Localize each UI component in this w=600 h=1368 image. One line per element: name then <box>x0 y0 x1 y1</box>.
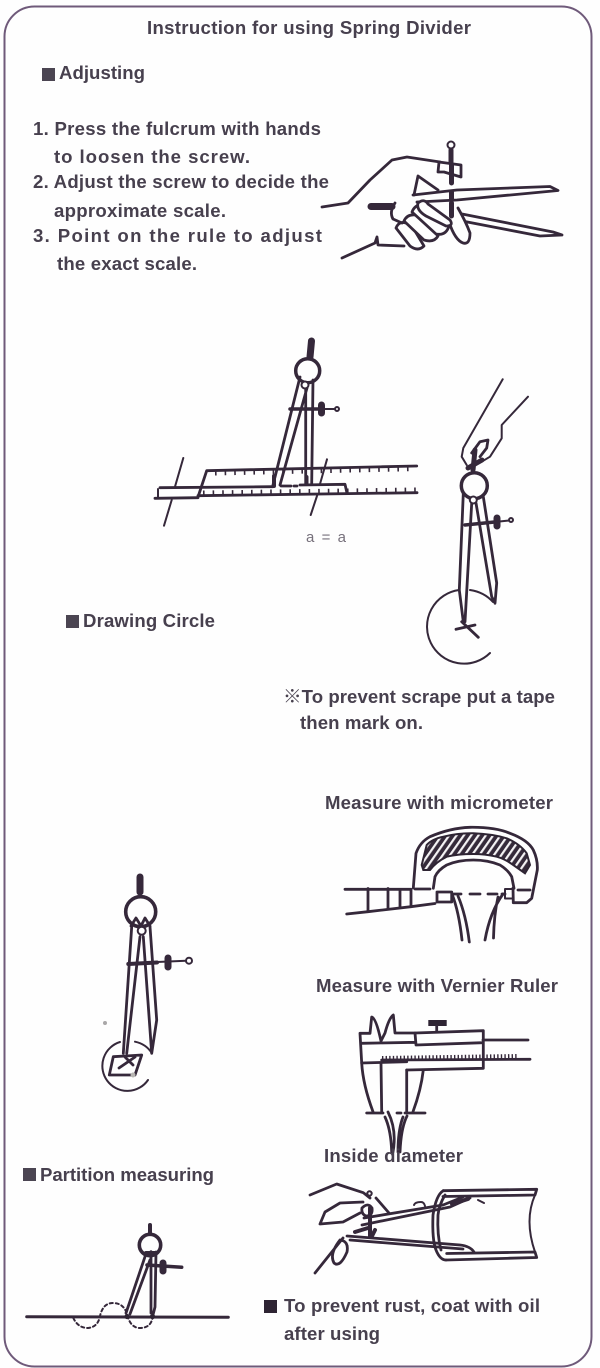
chart: divider set against a rule, a = a <box>155 341 417 526</box>
heading: Adjusting: Adjusting <box>59 62 145 83</box>
text block: adjusting steps: to loosen the screw. <box>54 146 250 167</box>
icon: measuring inside diameter of a pipe <box>310 1184 537 1273</box>
label: a = a: a = a <box>306 529 347 546</box>
text block: adjusting steps <box>33 118 329 274</box>
text block: adjusting steps: 1. Press the fulcrum with hands <box>33 118 321 139</box>
icon: vernier caliper <box>360 1015 530 1152</box>
text block: adjusting steps: 2. Adjust the screw to decide the <box>33 171 329 192</box>
callout: tape note: then mark on. <box>300 712 423 733</box>
icon: hand adjusting the divider screw <box>322 142 562 258</box>
heading: Partition measuring: Partition measuring <box>40 1164 214 1185</box>
callout: prevent rust note <box>264 1295 540 1344</box>
callout: tape note <box>283 686 555 733</box>
text block: adjusting steps: approximate scale. <box>54 200 226 221</box>
icon: hand holding divider drawing a circle <box>427 379 528 664</box>
icon: micrometer <box>345 827 537 942</box>
text block: adjusting steps: the exact scale. <box>57 253 197 274</box>
callout: prevent rust note: To prevent rust, coat with oil <box>284 1295 540 1316</box>
heading: Measure with Vernier Ruler: Measure with Vernier Ruler <box>316 975 558 996</box>
title: Instruction for using Spring Divider <box>147 17 471 38</box>
callout: prevent rust note: after using <box>284 1323 380 1344</box>
heading: Measure with micrometer: Measure with micrometer <box>325 792 553 813</box>
callout: tape note: ※To prevent scrape put a tape <box>283 686 555 707</box>
text block: adjusting steps: 3. Point on the rule to adjust <box>33 225 322 246</box>
icon: divider on taped work piece <box>102 877 192 1091</box>
heading: Drawing Circle: Drawing Circle <box>83 610 215 631</box>
chart: partition measuring with divider <box>27 1225 228 1328</box>
heading: Inside diameter: Inside diameter <box>324 1145 463 1166</box>
